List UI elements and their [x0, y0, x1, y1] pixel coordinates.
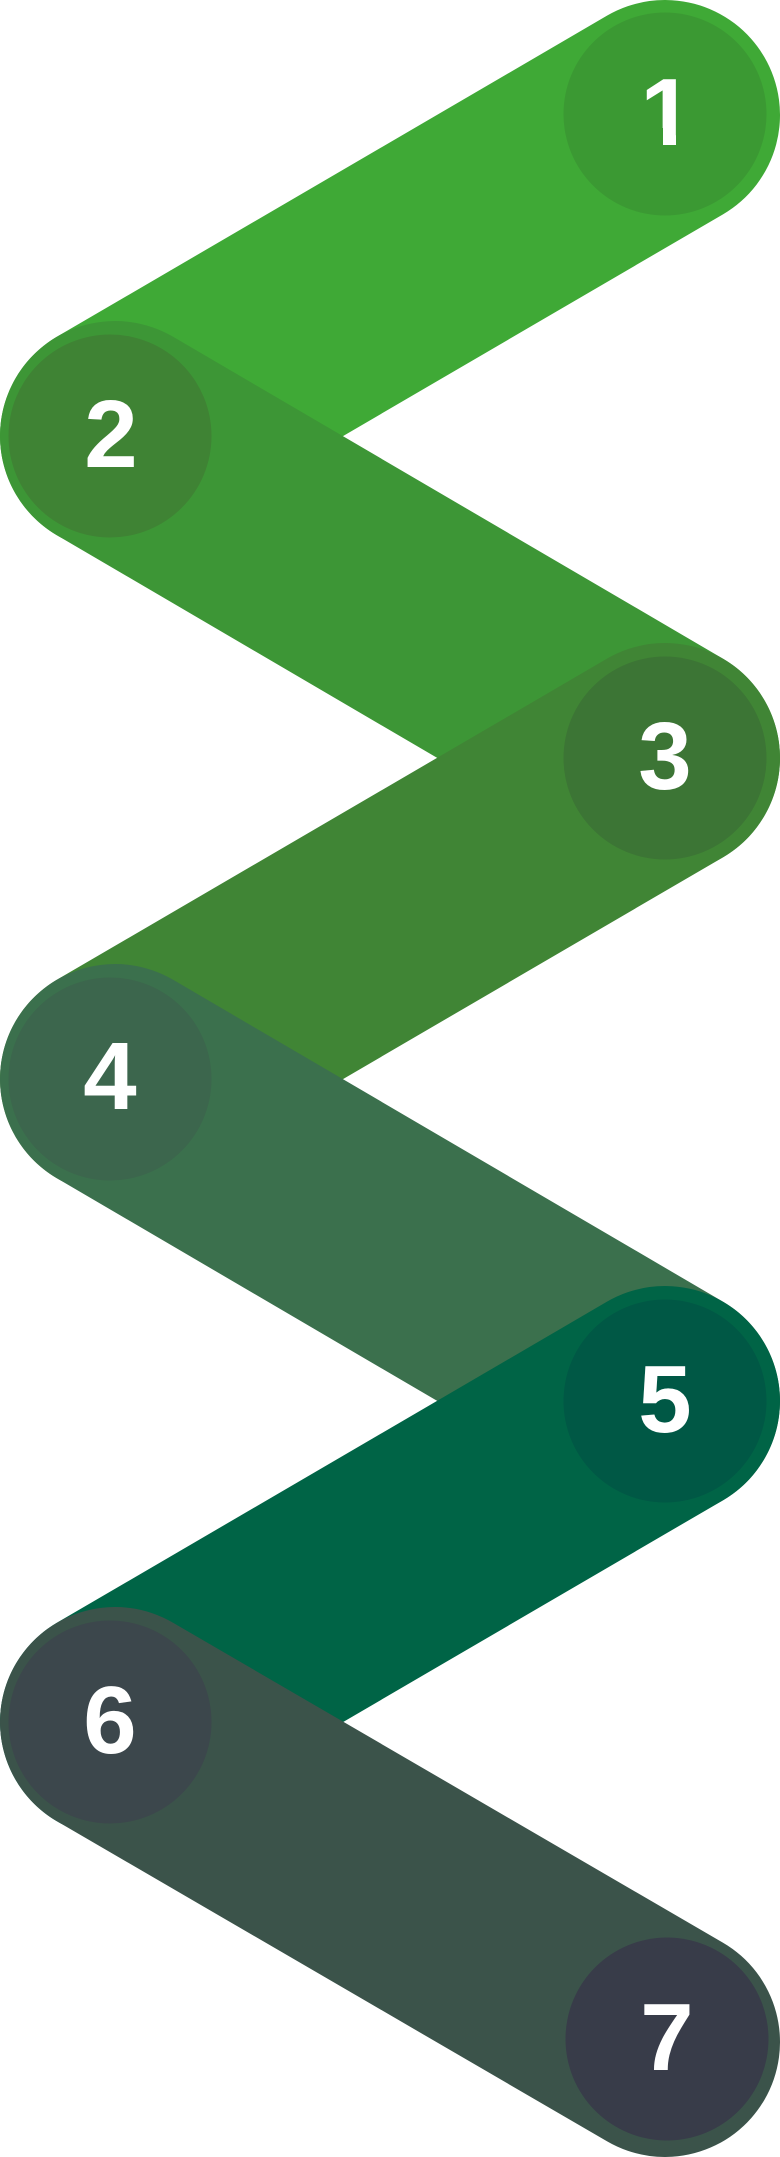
band: step 5 to 6	[115, 1401, 665, 1722]
step 1 badge: 1	[640, 59, 694, 166]
step 3 badge	[564, 656, 766, 860]
step 2 badge	[8, 334, 212, 538]
band: step 3 to 4	[115, 758, 665, 1079]
step 1 badge	[564, 12, 766, 216]
step 4 badge: 4	[83, 1023, 137, 1130]
step 2 badge: 2	[84, 381, 138, 488]
step 5 badge: 5	[638, 1346, 692, 1453]
step 3 badge: 3	[638, 703, 692, 810]
band: step 2 to 3	[115, 436, 665, 758]
step 6 badge: 6	[83, 1667, 137, 1774]
step 6 badge	[8, 1620, 212, 1824]
band: step 6 to 7	[115, 1722, 665, 2042]
step 5 badge	[564, 1300, 766, 1502]
step 7 badge: 7	[640, 1984, 694, 2091]
band: step 4 to 5	[115, 1079, 665, 1401]
step 7 badge	[566, 1938, 768, 2140]
band: step 1 to 2	[115, 115, 665, 436]
step 4 badge	[8, 978, 212, 1180]
